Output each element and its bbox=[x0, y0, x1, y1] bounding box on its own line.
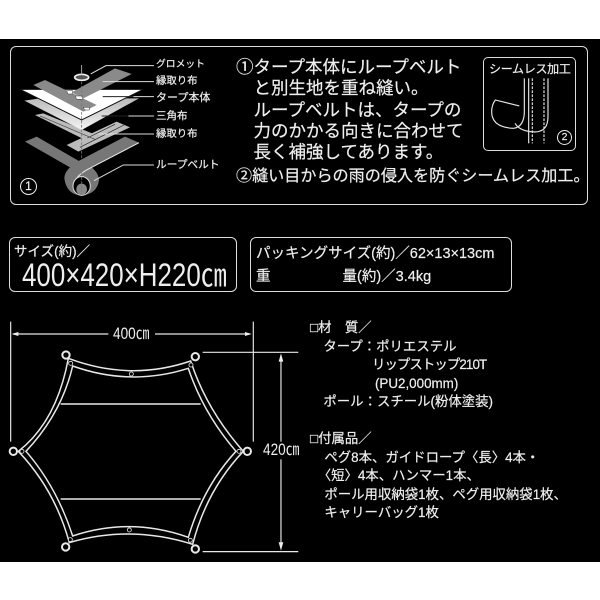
label: binding cloth 2: 縁取り布 bbox=[156, 129, 198, 140]
tarp body bbox=[20, 89, 143, 120]
feature description: 力のかかる向きに合わせて bbox=[253, 121, 464, 141]
marker 2 bbox=[557, 130, 572, 145]
feature description: ②縫い目からの雨の侵入を防ぐシームレス加工。 bbox=[236, 167, 590, 185]
accessories: □付属品／ bbox=[310, 431, 372, 446]
grommets bbox=[10, 351, 251, 553]
crossbars bbox=[61, 404, 201, 499]
label: triangle cloth: 三角布 bbox=[156, 110, 188, 122]
accessories bbox=[310, 431, 567, 520]
label: loop belt: ループベルト bbox=[156, 159, 219, 171]
height label: 420㎝ bbox=[263, 440, 299, 459]
outer outline bbox=[18, 358, 243, 544]
width label: 400㎝ bbox=[113, 324, 149, 343]
accessories: ペグ8本、ガイドロープ〈長〉4本・ bbox=[324, 450, 539, 464]
panel: packing bbox=[250, 237, 512, 292]
size value: 400×420×H220㎝ bbox=[22, 257, 227, 293]
packing size: パッキングサイズ(約)／62×13×13cm bbox=[256, 246, 494, 262]
panel: seamless detail bbox=[483, 57, 576, 151]
marker 1 bbox=[20, 178, 37, 195]
grommet bbox=[75, 74, 89, 80]
label: seamless: シームレス加工 bbox=[489, 62, 571, 76]
triangle cloth bbox=[24, 98, 139, 130]
feature description bbox=[236, 57, 590, 185]
accessories: 〈短〉4本、ハンマー1本、 bbox=[324, 468, 480, 483]
marker 1: 1 bbox=[25, 179, 32, 193]
accessories: ポール用収納袋1枚、ペグ用収納袋1枚、 bbox=[324, 486, 567, 502]
feature description: 長く補強してあります。 bbox=[253, 142, 443, 162]
materials: ポール：スチール(粉体塗装) bbox=[323, 394, 493, 409]
leader lines bbox=[91, 66, 154, 181]
feature description: と別生地を重ね縫い。 bbox=[253, 78, 428, 98]
size label: サイズ(約)／ bbox=[14, 244, 90, 259]
feature description: ①タープ本体にループベルト bbox=[236, 57, 461, 77]
marker 2: 2 bbox=[562, 131, 567, 143]
panel: features bbox=[10, 46, 588, 205]
materials bbox=[310, 320, 493, 410]
materials: タープ：ポリエステル bbox=[323, 338, 456, 354]
upper binding cloth bbox=[33, 80, 97, 112]
weight: 重 量(約)／3.4kg bbox=[256, 269, 431, 285]
roll core bbox=[73, 177, 90, 195]
feature description: ループベルトは、タープの bbox=[253, 100, 461, 120]
label: tarp body: タープ本体 bbox=[156, 92, 210, 104]
panel: size bbox=[9, 237, 237, 292]
materials: リップストップ210T bbox=[372, 357, 486, 372]
dimension lines bbox=[11, 322, 298, 552]
bottom loop belt left strip bbox=[25, 137, 80, 167]
label: binding cloth: 縁取り布 bbox=[156, 76, 198, 87]
materials: □材 質／ bbox=[310, 320, 372, 335]
accessories: キャリーバッグ1枚 bbox=[324, 505, 439, 520]
inner outline bbox=[26, 366, 236, 537]
bottom loop belt roll bbox=[64, 137, 139, 195]
label: grommet: グロメット bbox=[156, 59, 205, 70]
lower binding cloth bbox=[35, 113, 100, 142]
materials: (PU2,000mm) bbox=[375, 376, 458, 390]
